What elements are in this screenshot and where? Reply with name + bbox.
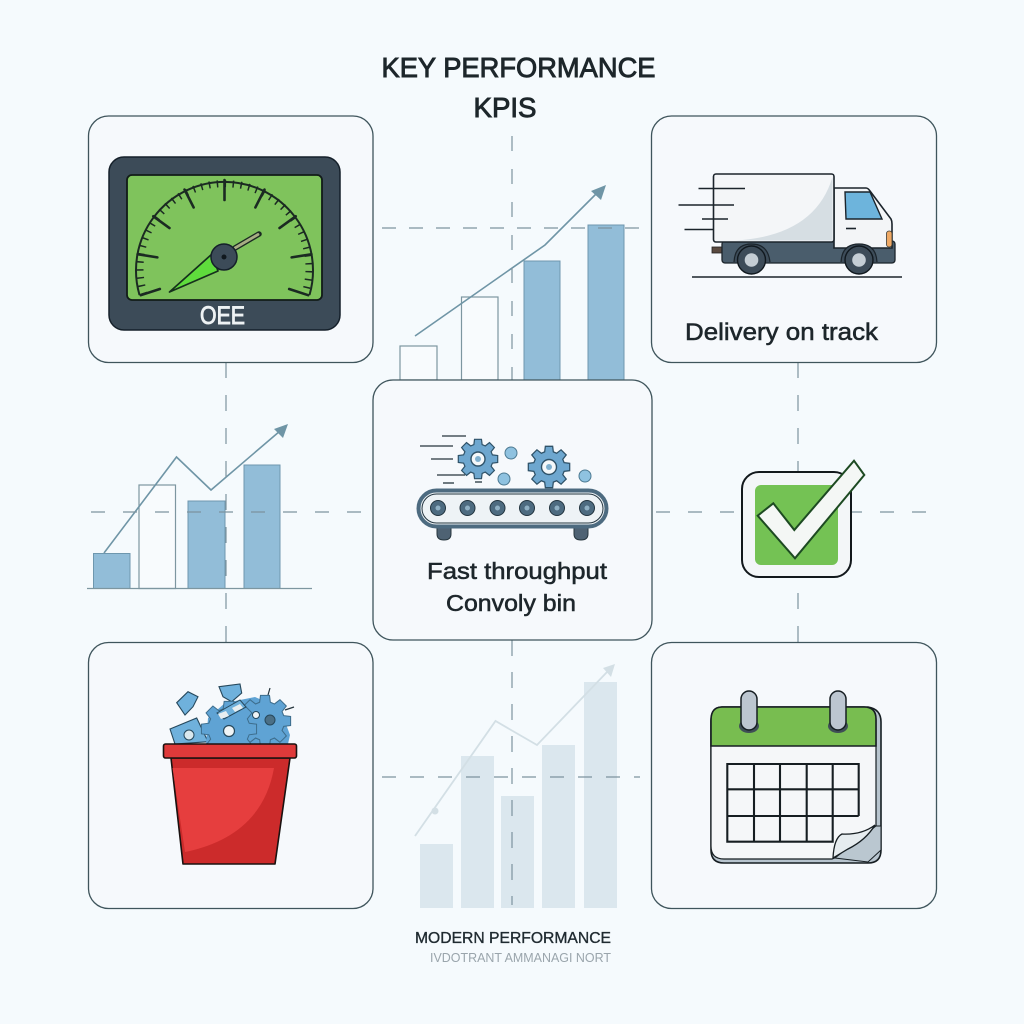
label: throughput caption (427, 558, 608, 616)
title (382, 52, 656, 123)
label: throughput caption: Convoly bin (446, 590, 576, 616)
footer caption: MODERN PERFORMANCE (415, 930, 611, 947)
panel: throughput (373, 380, 652, 640)
footer caption: IVDOTRANT AMMANAGI NORT (430, 951, 611, 965)
label: throughput caption: Fast throughput (427, 558, 608, 584)
icon: delivery truck (678, 174, 902, 277)
panel: scrap bin (88, 642, 373, 908)
title: KEY PERFORMANCE (382, 52, 656, 83)
label: OEE: OEE (200, 302, 245, 330)
panel: OEE gauge (88, 116, 373, 362)
footer caption (415, 930, 611, 965)
icon: conveyor with gears (418, 436, 606, 540)
label: delivery on track: Delivery on track (685, 319, 879, 346)
title: KPIS (474, 92, 536, 123)
chart: rising bars top centre (400, 185, 624, 380)
icon: OEE gauge (109, 157, 340, 330)
panel: delivery (652, 116, 936, 362)
chart: faded bars bottom centre (415, 664, 617, 908)
chart: bars with zigzag trend left (87, 424, 312, 588)
icon: red bin of scrap (164, 684, 296, 864)
panel: on-time schedule (652, 642, 936, 908)
icon: green check box (742, 461, 864, 577)
icon: calendar (711, 691, 881, 863)
